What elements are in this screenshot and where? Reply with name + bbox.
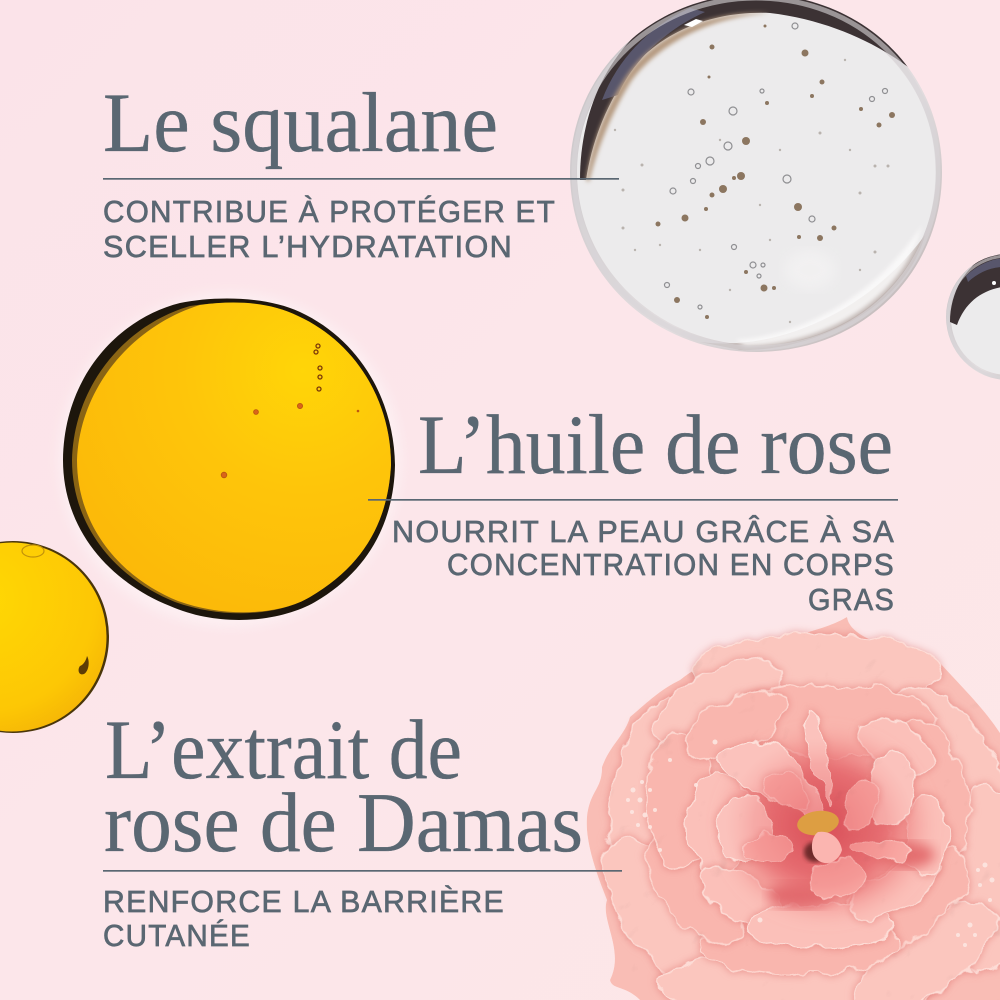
deep red heart (715, 725, 935, 925)
glass rim highlight (574, 0, 938, 348)
text: l'extrait de rose benefit: CUTANÉE (103, 918, 251, 953)
rule: le squalane (103, 178, 619, 180)
water droplets (626, 740, 994, 947)
small clear droplet (946, 250, 1000, 380)
text: le squalane benefit: SCELLER L’HYDRATATION (103, 230, 513, 264)
heading: l'extrait de rose de damas (104, 703, 583, 870)
rule: l'huile de rose (368, 499, 898, 501)
section: l'extrait de rose de damas (103, 703, 622, 953)
oil bubbles (221, 403, 359, 478)
section: l'huile de rose (368, 398, 898, 617)
section: le squalane (103, 76, 619, 264)
text: l'extrait de rose benefit: RENFORCE LA BARRIÈRE (103, 884, 505, 919)
flower centre (804, 842, 826, 862)
heading: l'extrait de rose de damas: L’extrait de (105, 703, 462, 797)
text: le squalane benefit: CONTRIBUE À PROTÉGER ET (103, 194, 556, 229)
outer petals (581, 634, 1000, 1000)
central petals (716, 713, 920, 864)
air bubbles (664, 23, 888, 309)
middle petals (631, 678, 985, 975)
heading: le squalane: Le squalane (103, 76, 498, 170)
text: l'huile de rose benefit: CONCENTRATION EN CORPS (447, 548, 895, 582)
red tint over central petals (725, 737, 915, 913)
text: l'huile de rose benefit: NOURRIT LA PEAU GRÂCE À SA (392, 514, 895, 549)
clear squalane droplet (570, 0, 942, 352)
inner pale petals (688, 706, 950, 947)
text: le squalane benefit (103, 194, 556, 264)
heading: l'extrait de rose de damas: rose de Damas (104, 776, 583, 870)
brown specks (656, 24, 895, 319)
text: l'extrait de rose benefit (103, 884, 505, 953)
heading: l'huile de rose: L’huile de rose (418, 398, 893, 492)
rose flower (581, 617, 1000, 1000)
rule: l'extrait de rose (103, 870, 622, 872)
small yellow oil droplet (0, 541, 109, 733)
text: l'huile de rose benefit (392, 514, 895, 617)
text: l'huile de rose benefit: GRAS (808, 583, 895, 617)
faint specks (614, 59, 890, 323)
rose silhouette (587, 617, 1000, 1000)
large yellow oil droplet (59, 293, 401, 627)
